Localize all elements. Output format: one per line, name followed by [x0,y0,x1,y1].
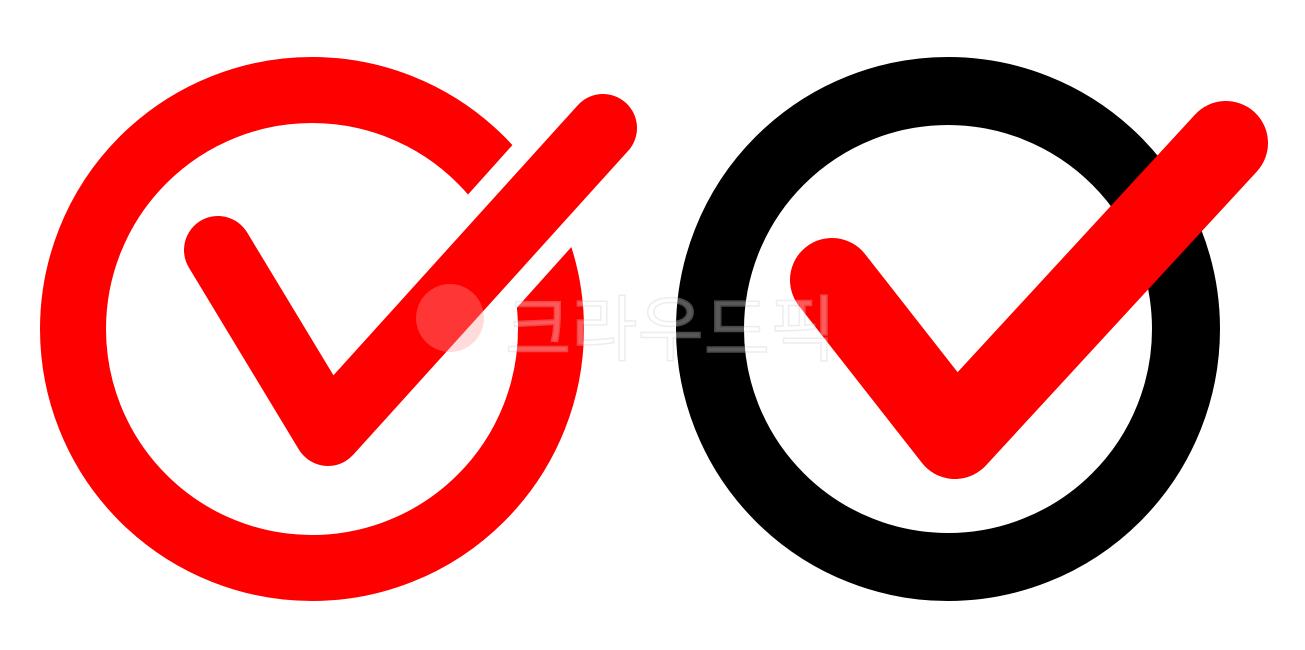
icon: red circle check [73,90,603,568]
icon: black circle with red check [710,91,1226,567]
watermark: 크라우드픽 [505,291,836,371]
